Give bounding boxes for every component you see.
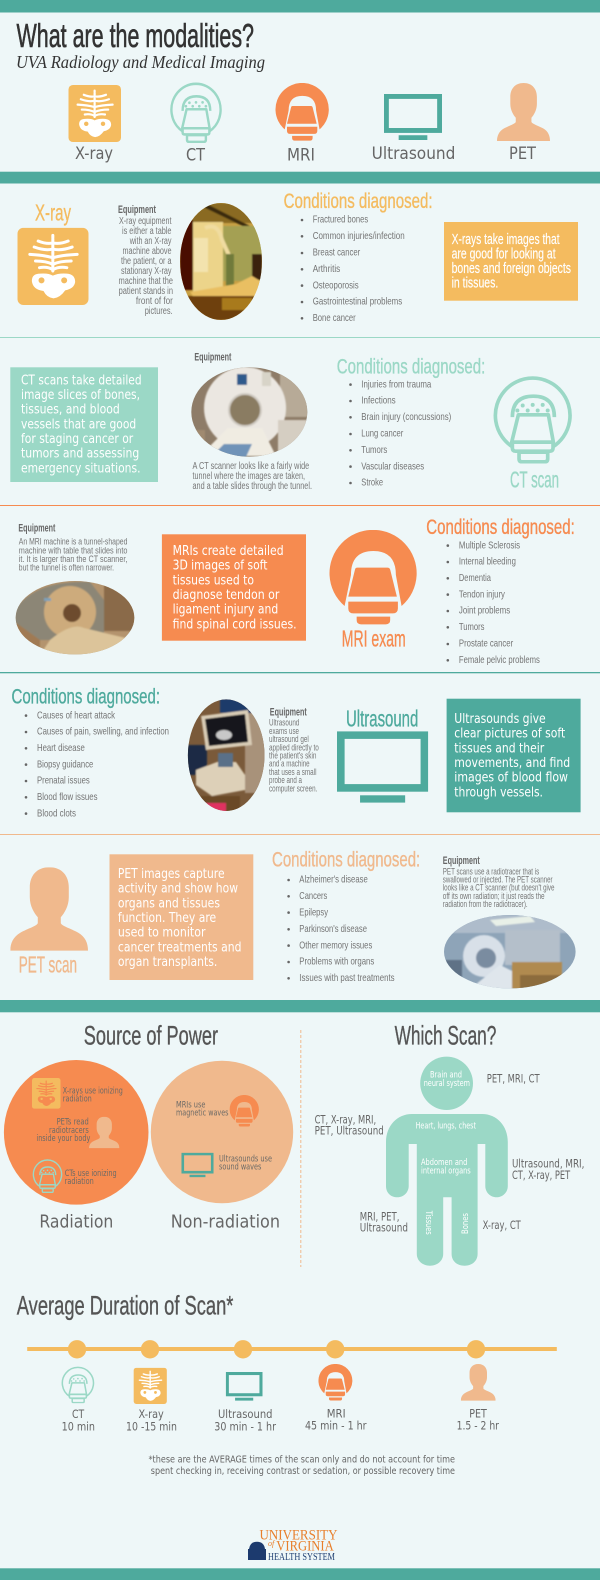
text: x-ray equipment: machine above	[122, 246, 172, 257]
logo: University of Virginia Health System: UNIVERSITY	[260, 1527, 338, 1543]
list: ultrasound conditions: Blood flow issues	[37, 791, 98, 803]
callout: ultrasound: through vessels.	[454, 784, 543, 800]
list: ultrasound conditions: Causes of pain, swelling, and infection	[37, 726, 169, 738]
list: CT conditions: Stroke	[361, 477, 383, 489]
list: MRI conditions: Internal bleeding	[459, 556, 516, 568]
callout: PET: organ transplants.	[118, 954, 217, 970]
logo: University of Virginia Health System: VIRGINIA	[276, 1539, 334, 1555]
text: x-ray equipment: X-ray equipment	[119, 216, 172, 227]
label: chest scans: CT, X-ray, MRI,	[315, 1112, 376, 1126]
list: ultrasound conditions	[25, 709, 169, 819]
list: x-ray conditions: Osteoporosis	[313, 279, 359, 291]
callout: PET: function. They are	[118, 910, 216, 926]
item: CT duration: 10 min	[62, 1419, 95, 1433]
callout: CT: vessels that are good	[21, 416, 136, 432]
label: chest scans	[315, 1112, 384, 1138]
list: MRI conditions: Dementia	[459, 572, 491, 584]
callout: x-ray	[444, 222, 578, 301]
text: bones: Bones	[461, 1213, 471, 1234]
text: ultrasound equipment	[269, 707, 319, 793]
list: PET conditions: Alzheimer's disease	[299, 874, 368, 886]
list: ultrasound conditions: Biopsy guidance	[37, 758, 93, 770]
label: ultrasound: Ultrasound	[372, 144, 455, 164]
icon: x-ray small	[32, 1078, 60, 1109]
item: ultrasound duration: Ultrasound	[218, 1407, 272, 1421]
icon: x-ray large	[18, 228, 88, 305]
list: ultrasound conditions: Prenatal issues	[37, 775, 90, 787]
text: ultrasound equipment: that uses a small	[269, 767, 316, 777]
icon: ultrasound small	[183, 1154, 212, 1177]
text: tissues: Tissues	[423, 1210, 433, 1235]
list: x-ray conditions: Common injuries/infection	[313, 230, 405, 242]
text: x-ray radiation	[63, 1087, 123, 1105]
label: radiation: Radiation	[39, 1211, 113, 1232]
list: x-ray conditions	[301, 214, 405, 324]
text: PET radiation: PETs read	[57, 1118, 89, 1128]
callout: ultrasound	[447, 699, 581, 812]
text: PET equipment: radiation from the radiotracer).	[443, 899, 528, 909]
text: MRI equipment description: machine with table that slides into	[19, 545, 127, 555]
text: x-ray radiation: radiation	[63, 1095, 92, 1105]
list: CT conditions	[349, 378, 451, 489]
callout: x-ray: X-rays take images that	[452, 232, 560, 248]
text: ultrasound equipment: applied directly to	[269, 742, 319, 752]
callout: MRI: ligament injury and	[173, 602, 278, 618]
text: ultrasound waves: sound waves	[219, 1163, 262, 1173]
logo: University of Virginia Health System	[248, 1527, 338, 1563]
callout: CT: tumors and assessing	[21, 446, 139, 462]
icon: ultrasound	[386, 96, 440, 140]
text: MRI equipment description: it. It is larger than the CT scanner,	[19, 554, 127, 564]
text: MRI waves	[176, 1101, 229, 1119]
callout: CT: image slices of bones,	[21, 387, 140, 403]
callout: CT: emergency situations.	[21, 460, 140, 476]
icon: PET small	[89, 1117, 119, 1148]
label: PET: PET	[509, 144, 537, 164]
photo: x-ray room	[180, 203, 262, 320]
heading: conditions: Conditions diagnosed:	[272, 849, 420, 872]
item: x-ray duration: 10 -15 min	[126, 1419, 177, 1433]
list: CT conditions: Lung cancer	[361, 428, 404, 440]
text: CT equipment caption	[192, 461, 312, 492]
item: PET duration: PET	[469, 1406, 488, 1420]
list: ultrasound conditions: Heart disease	[37, 742, 85, 754]
text: abdomen	[421, 1158, 471, 1176]
callout: PET	[110, 854, 253, 980]
icon: PET	[497, 83, 550, 141]
text: x-ray equipment: the patient, or a	[121, 256, 172, 267]
text: ultrasound equipment: Equipment	[270, 707, 307, 719]
label: MRI: MRI	[287, 146, 315, 166]
text: MRI equipment description	[19, 536, 127, 573]
icon: MRI	[276, 83, 329, 141]
item: PET duration	[457, 1364, 499, 1433]
circle: radiation	[4, 1060, 148, 1205]
callout: PET: cancer treatments and	[118, 939, 242, 955]
item: MRI duration	[305, 1364, 367, 1433]
list: ultrasound conditions: Causes of heart attack	[37, 709, 116, 721]
text: x-ray equipment: machine that the	[119, 276, 173, 287]
panel: modality icon row	[68, 83, 550, 166]
list: CT conditions: Infections	[361, 395, 396, 407]
list: PET conditions: Parkinson's disease	[299, 923, 367, 935]
panel: source of power	[4, 1020, 293, 1232]
timeline	[27, 1340, 557, 1359]
text: x-ray equipment: is either a table	[122, 226, 172, 237]
panel: CT	[10, 352, 570, 492]
label: x-ray: X-ray	[75, 144, 113, 164]
text: MRI waves: MRIs use	[176, 1101, 206, 1111]
callout: x-ray: in tissues.	[452, 276, 498, 292]
text: x-ray equipment	[118, 204, 173, 317]
subtitle: UVA Radiology and Medical Imaging	[16, 52, 265, 72]
text: CT equipment caption: A CT scanner looks like a fairly wide	[192, 461, 310, 472]
logo: University of Virginia Health System: HEALTH SYSTEM	[268, 1552, 335, 1563]
label: tissue scans: MRI, PET,	[360, 1210, 400, 1224]
text: CT radiation: CTs use ionizing	[65, 1169, 117, 1179]
callout: MRI	[162, 534, 306, 641]
list: MRI conditions: Multiple Sclerosis	[459, 539, 520, 551]
label: tissue scans	[360, 1210, 408, 1235]
list: PET conditions: Problems with organs	[299, 956, 374, 968]
callout: ultrasound: clear pictures of soft	[454, 726, 565, 742]
text: x-ray radiation: X-rays use ionizing	[63, 1087, 123, 1097]
list: MRI conditions	[446, 539, 540, 666]
label: CT: CT	[186, 146, 206, 166]
text: x-ray equipment: stationary X-ray	[121, 266, 172, 277]
text: PET equipment: Equipment	[443, 855, 480, 867]
circle: non-radiation	[151, 1061, 293, 1203]
label: chest scans: PET, Ultrasound	[315, 1124, 384, 1138]
text: ultrasound equipment: ultrasound gel	[269, 734, 309, 744]
item: PET duration: 1.5 - 2 hr	[457, 1419, 499, 1433]
panel: PET	[10, 849, 576, 989]
list: ultrasound conditions: Blood clots	[37, 807, 76, 819]
top banner bar	[0, 0, 600, 12]
heading: which scan: Which Scan?	[395, 1020, 496, 1050]
callout: MRI: find spinal cord issues.	[173, 616, 297, 632]
panel: x-ray	[18, 190, 578, 324]
footnote: spent checking in, receiving contrast or sedation, or possible recovery time	[151, 1466, 455, 1477]
text: abdomen: Abdomen and	[421, 1158, 467, 1168]
icon: CT small	[33, 1160, 62, 1192]
callout: PET: used to monitor	[118, 925, 206, 941]
label: abdomen scans: CT, X-ray, PET	[512, 1168, 571, 1182]
heading: ultrasound: Ultrasound	[346, 706, 418, 732]
list: PET conditions	[287, 874, 395, 984]
heading: MRI exam: MRI exam	[342, 626, 406, 652]
text: PET radiation	[36, 1118, 91, 1144]
label: abdomen scans	[512, 1157, 584, 1182]
icon: x-ray	[68, 85, 121, 142]
list: x-ray conditions: Bone cancer	[313, 312, 356, 324]
text: CT radiation: radiation	[65, 1177, 94, 1187]
text: x-ray equipment: pictures.	[145, 306, 173, 317]
text: abdomen: internal organs	[421, 1166, 471, 1176]
list: x-ray conditions: Arthritis	[313, 263, 340, 275]
section divider bar	[0, 1000, 600, 1012]
list: PET conditions: Other memory issues	[299, 939, 372, 951]
footnote	[148, 1455, 455, 1477]
label: MRI equipment: Equipment	[18, 522, 56, 534]
callout: ultrasound: tissues and their	[454, 740, 545, 756]
text: ultrasound equipment: probe and a	[269, 775, 302, 785]
list: CT conditions: Brain injury (concussions)	[361, 411, 451, 423]
heading: conditions: Conditions diagnosed:	[12, 685, 160, 708]
callout: x-ray: are good for looking at	[452, 247, 556, 263]
list: x-ray conditions: Breast cancer	[313, 247, 361, 259]
list: CT conditions: Vascular diseases	[361, 460, 424, 472]
icon: ultrasound large	[341, 735, 424, 803]
bottom banner bar	[0, 1568, 600, 1580]
item: CT duration: CT	[72, 1407, 85, 1421]
photo: ultrasound machine	[187, 699, 265, 812]
callout: ultrasound: Ultrasounds give	[454, 711, 546, 727]
heading: x-ray: X-ray	[35, 200, 71, 226]
text: PET equipment: swallowed or injected. The PET scanner	[443, 875, 553, 885]
figure: body diagram	[386, 1057, 508, 1266]
callout: PET: activity and show how	[118, 881, 238, 897]
list: PET conditions: Epilepsy	[299, 906, 329, 918]
text: ultrasound waves	[219, 1155, 272, 1173]
text: ultrasound equipment: exams use	[269, 726, 299, 736]
text: MRI waves: magnetic waves	[176, 1109, 229, 1119]
text: PET radiation: inside your body	[36, 1134, 91, 1144]
callout: CT: for staging cancer or	[21, 431, 134, 447]
panel: which scan	[315, 1020, 584, 1266]
logo: University of Virginia Health System: of	[268, 1539, 276, 1548]
callout: ultrasound: movements, and find	[454, 755, 570, 771]
photo: PET scanner	[444, 915, 576, 989]
panel: MRI	[15, 516, 575, 666]
item: MRI duration: 45 min - 1 hr	[305, 1419, 367, 1433]
list: MRI conditions: Female pelvic problems	[459, 654, 540, 666]
icon: CT large	[495, 378, 570, 462]
panel: average duration	[17, 1290, 557, 1477]
heading: average duration: Average Duration of Scan*	[17, 1290, 234, 1320]
icon: MRI large	[330, 530, 417, 624]
list: PET conditions: Issues with past treatments	[299, 972, 395, 984]
callout: CT	[10, 367, 158, 482]
callout: MRI: MRIs create detailed	[173, 543, 284, 559]
text: ultrasound equipment: the patient's skin	[269, 750, 316, 760]
callout: PET: organs and tissues	[118, 895, 220, 911]
footnote: *these are the AVERAGE times of the scan only and do not account for time	[148, 1455, 455, 1466]
text: x-ray equipment: patient stands in	[119, 286, 173, 297]
text: x-ray equipment: Equipment	[118, 204, 156, 216]
text: PET equipment: PET scans use a radiotracer that is	[443, 866, 540, 876]
item: x-ray duration: X-ray	[138, 1407, 164, 1421]
photo: CT scanner	[191, 367, 308, 457]
list: MRI conditions: Prostate cancer	[459, 638, 514, 650]
item: ultrasound duration	[214, 1374, 276, 1433]
item: ultrasound duration: 30 min - 1 hr	[214, 1419, 276, 1433]
list: x-ray conditions: Fractured bones	[313, 214, 368, 226]
text: brain	[424, 1071, 470, 1089]
text: MRI equipment description: An MRI machine is a tunnel-shaped	[19, 536, 127, 546]
text: PET equipment: off its own radiation; it just reads the	[443, 891, 545, 901]
heading: PET scan: PET scan	[19, 952, 77, 978]
heading: conditions: Conditions diagnosed:	[284, 190, 433, 213]
text: PET equipment	[443, 855, 554, 909]
text: PET equipment: looks like a CT scanner (but doesn't give	[443, 883, 554, 893]
callout: PET: PET images capture	[118, 866, 225, 882]
heading: CT scan: CT scan	[510, 466, 559, 492]
text: brain: Brain and	[430, 1071, 462, 1081]
callout: CT: tissues, and blood	[21, 402, 120, 418]
text: ultrasound equipment: and a machine	[269, 759, 310, 769]
text: x-ray equipment: with an X-ray	[129, 236, 172, 247]
text: brain: neural system	[424, 1079, 470, 1089]
icon: CT	[171, 84, 221, 142]
item: x-ray duration	[126, 1368, 177, 1433]
text: ultrasound waves: Ultrasounds use	[219, 1155, 272, 1165]
icon: MRI small	[230, 1095, 259, 1126]
label: tissue scans: Ultrasound	[360, 1221, 408, 1235]
icon: PET large	[10, 867, 88, 951]
text: CT radiation	[65, 1169, 117, 1187]
heading: conditions: Conditions diagnosed:	[337, 355, 485, 378]
text: chest: Heart, lungs, chest	[416, 1122, 476, 1132]
callout: MRI: 3D images of soft	[173, 558, 268, 574]
label: CT equipment: Equipment	[194, 352, 232, 364]
text: CT equipment caption: tunnel where the images are taken,	[192, 471, 305, 482]
text: x-ray equipment: front of for	[136, 296, 173, 307]
callout: ultrasound: images of blood flow	[454, 770, 568, 786]
item: MRI duration: MRI	[327, 1406, 346, 1420]
list: MRI conditions: Joint problems	[459, 605, 510, 617]
panel: ultrasound	[12, 685, 581, 819]
text: PET radiation: radiotracers	[49, 1126, 89, 1136]
callout: MRI: tissues used to	[173, 572, 254, 588]
list: MRI conditions: Tendon injury	[459, 588, 505, 600]
label: non-radiation: Non-radiation	[171, 1211, 280, 1232]
text: ultrasound equipment: Ultrasound	[269, 718, 299, 728]
title: What are the modalities?	[16, 17, 254, 54]
label: bone scans: X-ray, CT	[483, 1218, 522, 1232]
list: CT conditions: Injuries from trauma	[361, 378, 431, 390]
list: MRI conditions: Tumors	[459, 621, 484, 633]
section divider bar	[0, 172, 600, 184]
callout: MRI: diagnose tendon or	[173, 587, 280, 603]
photo: MRI machine	[15, 581, 135, 655]
text: CT equipment caption: and a table slides through the tunnel.	[192, 481, 312, 492]
list: CT conditions: Tumors	[361, 444, 387, 456]
text: ultrasound equipment: computer screen.	[269, 783, 317, 793]
list: PET conditions: Cancers	[299, 890, 327, 902]
callout: CT: CT scans take detailed	[21, 372, 142, 388]
label: brain scans: PET, MRI, CT	[487, 1072, 540, 1086]
list: x-ray conditions: Gastrointestinal problems	[313, 296, 402, 308]
item: CT duration	[62, 1367, 95, 1433]
text: MRI equipment description: but the tunnel is often narrower.	[19, 563, 114, 573]
heading: source of power: Source of Power	[84, 1020, 218, 1050]
